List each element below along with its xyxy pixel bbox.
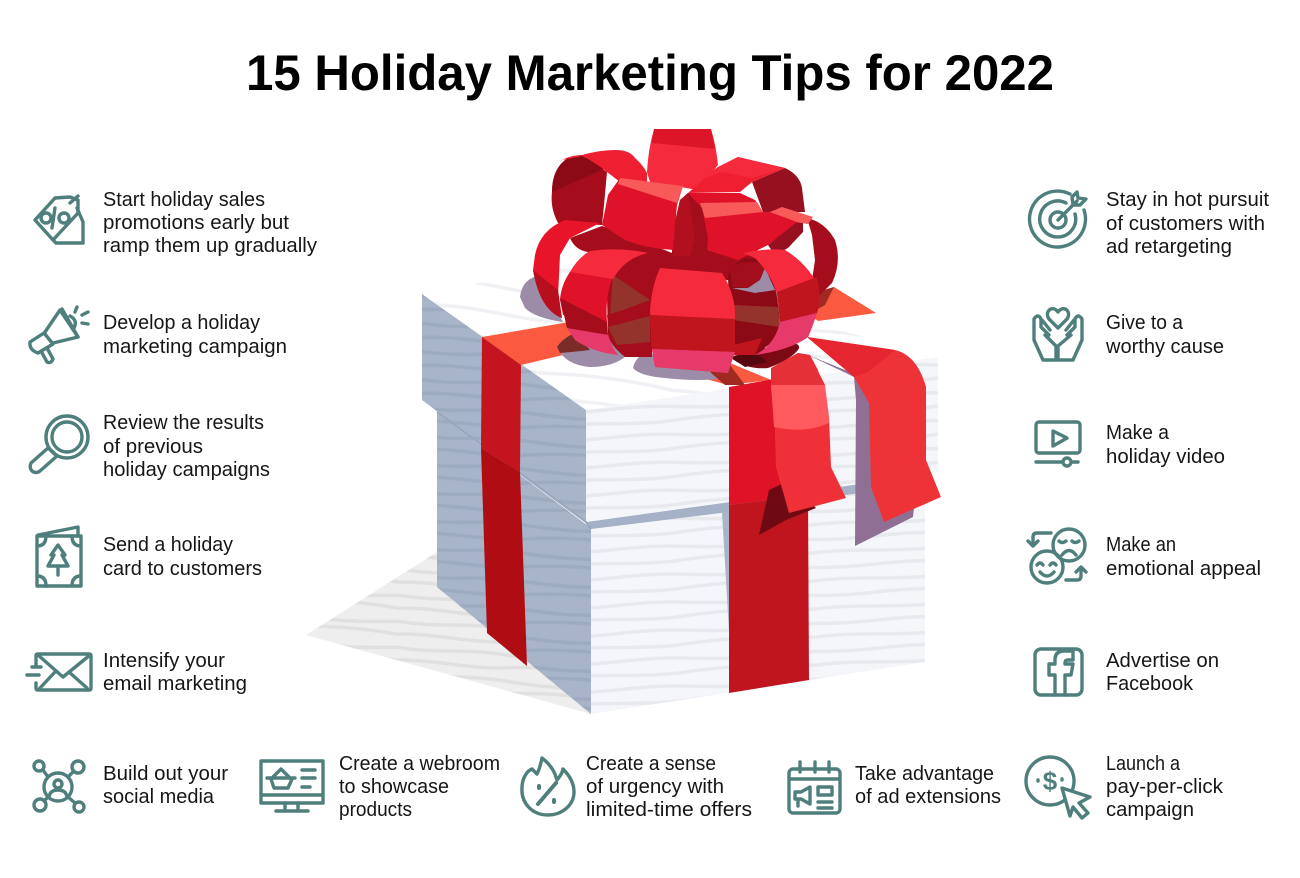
text <box>103 763 228 808</box>
text <box>1106 422 1225 468</box>
tip: worthy cause <box>1034 309 1224 360</box>
text: of urgency with <box>586 776 724 798</box>
red bow <box>533 129 838 373</box>
text <box>586 753 752 821</box>
tip: webroom <box>261 753 500 821</box>
bow loop: top right <box>688 157 805 212</box>
text: worthy cause <box>1105 336 1224 358</box>
text: Stay in hot pursuit <box>1106 189 1269 211</box>
text: Take advantage <box>855 763 994 785</box>
text: Review the results <box>103 412 264 434</box>
text: Make an <box>1106 534 1176 556</box>
icon: magnifying glass <box>30 416 88 472</box>
text: Start holiday sales <box>103 189 265 211</box>
text <box>1106 534 1261 580</box>
text <box>855 763 1001 808</box>
tip: facebook <box>1035 649 1219 695</box>
ribbon on box <box>481 287 876 693</box>
icon: monitor with basket <box>261 761 323 811</box>
icon: video player <box>1036 422 1080 466</box>
text <box>1106 753 1224 821</box>
text: of ad extensions <box>855 786 1001 808</box>
text: Create a sense <box>586 753 716 775</box>
tip: emotional appeal <box>1028 529 1261 583</box>
icon: dollar with cursor: $ <box>1043 766 1058 796</box>
icon: envelope <box>27 654 91 690</box>
icon: social network <box>34 761 84 812</box>
text: to showcase <box>339 776 449 798</box>
tip: review results <box>30 412 270 481</box>
text: campaign <box>1106 799 1194 821</box>
text <box>103 312 287 358</box>
ribbon tails <box>759 337 941 546</box>
text: Make a <box>1106 422 1170 444</box>
text: holiday campaigns <box>103 459 270 481</box>
bow loop: centre right <box>688 193 797 260</box>
icon: megaphone <box>30 307 88 363</box>
text <box>1106 189 1269 258</box>
text: email marketing <box>103 673 247 695</box>
bow loop: left <box>533 220 672 318</box>
icon: flame with percent <box>522 758 574 815</box>
bow loop: front left <box>560 249 648 355</box>
bow loop: right <box>768 207 838 295</box>
text: card to customers <box>103 558 262 580</box>
icon: price tags <box>35 196 83 243</box>
tip: ad retargeting <box>1030 189 1269 258</box>
text: Give to a <box>1106 312 1184 334</box>
text: limited-time offers <box>586 799 752 821</box>
text: products <box>339 799 412 821</box>
text: of customers with <box>1106 213 1265 235</box>
text: Build out your <box>103 763 228 785</box>
tip: holiday video <box>1036 422 1225 468</box>
text: of previous <box>103 436 203 458</box>
text: Facebook <box>1106 673 1194 695</box>
text: Develop a holiday <box>103 312 260 334</box>
bow loop: front right <box>743 249 820 355</box>
text: ad retargeting <box>1106 236 1232 258</box>
bow centre filler <box>672 240 770 280</box>
bow loop: top left <box>552 150 647 225</box>
bow loop: front centre <box>650 268 735 373</box>
icon: greeting card <box>37 527 81 586</box>
box shadow on floor <box>306 552 591 714</box>
tip: email marketing <box>27 650 247 695</box>
text <box>103 412 270 481</box>
tip: holiday campaign <box>30 307 287 363</box>
text <box>103 534 262 580</box>
tip: pay-per-click <box>1026 753 1224 821</box>
tip: social media <box>34 761 228 812</box>
text <box>339 753 500 821</box>
text: Launch a <box>1106 753 1181 775</box>
text: promotions early but <box>103 212 289 234</box>
bow loop: centre narrow <box>673 193 708 256</box>
icon: hands holding heart <box>1034 309 1082 360</box>
text <box>1105 312 1224 358</box>
bow loop: front left back arch <box>607 252 672 357</box>
text <box>103 189 317 257</box>
icon: dollar with cursor <box>1026 757 1090 818</box>
bow loop: top centre <box>647 129 718 190</box>
tip: ad extensions <box>789 762 1001 813</box>
text: Create a webroom <box>339 753 500 775</box>
bow loop: centre left <box>602 178 683 250</box>
tip: urgency <box>522 753 752 821</box>
illustration: gift box with red bow <box>306 129 941 714</box>
box body <box>437 413 925 714</box>
text: Send a holiday <box>103 534 233 556</box>
icon: facebook logo <box>1035 649 1082 695</box>
text <box>103 650 247 695</box>
icon: happy and sad faces <box>1028 529 1086 583</box>
bow shadows on lid <box>520 276 834 385</box>
title: 15 Holiday Marketing Tips for 2022 <box>246 45 1054 101</box>
text: emotional appeal <box>1106 558 1261 580</box>
box lid <box>422 262 938 529</box>
text: ramp them up gradually <box>103 235 317 257</box>
icon: target with arrow <box>1030 191 1086 247</box>
tip: holiday card <box>37 527 262 586</box>
tip: start sales early <box>35 189 317 257</box>
text: Intensify your <box>103 650 225 672</box>
text: pay-per-click <box>1106 776 1224 798</box>
text: holiday video <box>1106 446 1225 468</box>
icon: calendar with megaphone <box>789 762 840 813</box>
text: marketing campaign <box>103 336 287 358</box>
bow loop: front right back arch <box>728 258 780 355</box>
text: social media <box>103 786 215 808</box>
text <box>1106 650 1219 695</box>
text: Advertise on <box>1106 650 1219 672</box>
